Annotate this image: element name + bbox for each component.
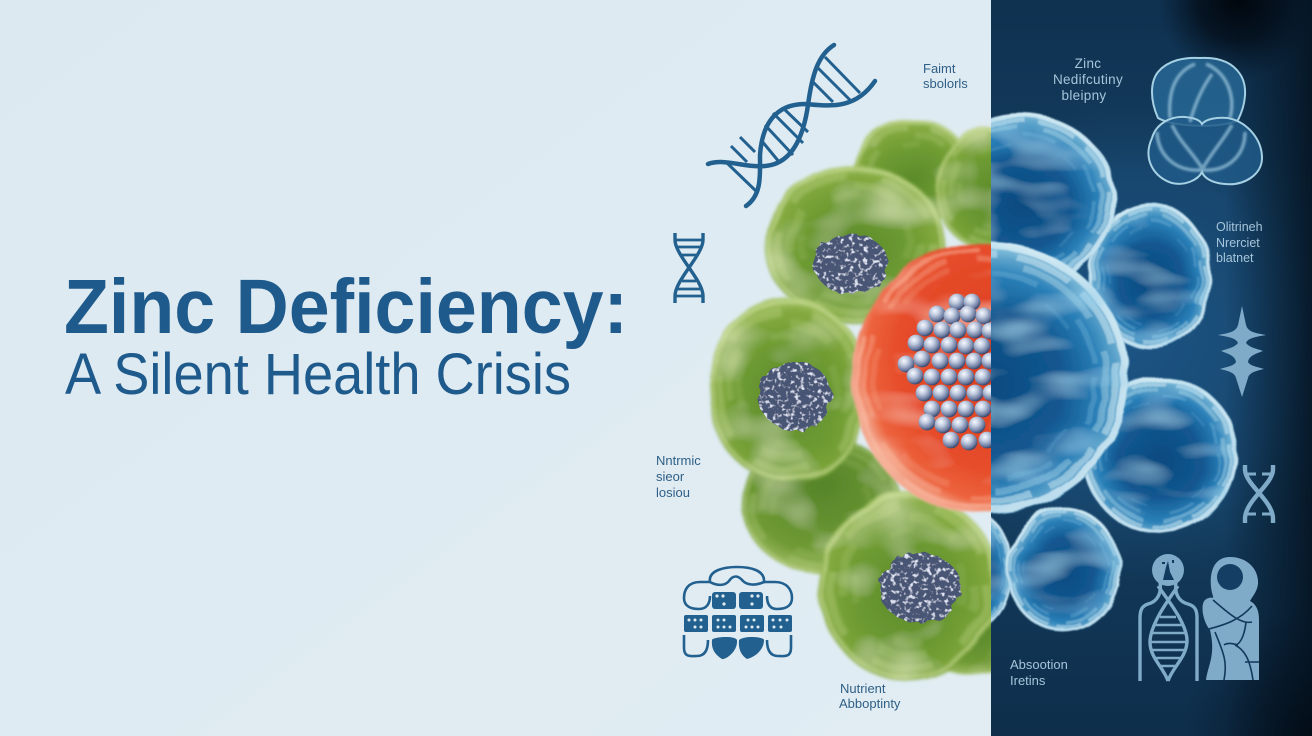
label: top centre: sbolorls [923, 76, 968, 91]
label: left lower: losiou [656, 485, 690, 500]
cell: upper left green [765, 165, 945, 323]
label: zinc: Zinc [1075, 56, 1101, 71]
dark background panel [991, 0, 1312, 736]
cell: central blue [991, 240, 1130, 515]
icon: small DNA helix [675, 233, 703, 303]
cell: lower behind green [742, 437, 902, 573]
label: zinc: bleipny [1062, 88, 1106, 103]
label: nutrient: Abboptinty [839, 696, 901, 711]
cell: bottom right behind [946, 621, 991, 677]
cell: left green [707, 298, 869, 482]
label: left lower: Nntrmic [656, 453, 701, 468]
cluster: upper left cell [814, 234, 888, 294]
zinc ball cluster [898, 294, 999, 450]
cell: top green [852, 118, 960, 220]
icon: figure with ring head [1203, 557, 1259, 680]
cluster: bottom cell [879, 553, 961, 623]
icon: figure with DNA [1140, 554, 1197, 681]
cell: central red [849, 242, 991, 514]
cell: bottom blue [1006, 506, 1120, 632]
label: right middle: Nrerciet [1216, 236, 1260, 250]
cell: bottom green [818, 492, 998, 680]
icon: spine [1218, 306, 1266, 397]
title: Zinc Deficiency: [64, 264, 628, 350]
label: left lower: sieor [656, 469, 685, 484]
label: top centre: Faimt [923, 61, 956, 76]
icon: intestine / absorption grid [684, 567, 792, 659]
cell: right upper blue [1088, 203, 1212, 349]
icon: translucent brain [1149, 58, 1262, 184]
cell: small blue sliver [991, 516, 1011, 624]
icon: small DNA, dark side [1245, 465, 1273, 523]
green cell cluster, left half [707, 119, 1100, 680]
cell: top blue [991, 111, 1118, 272]
label: absorption: Absootion [1010, 657, 1068, 672]
label: right middle: blatnet [1216, 251, 1254, 265]
cell: right lower blue [1082, 376, 1238, 534]
blue cell cluster, right half [851, 114, 1238, 632]
label: zinc: Nedifcutiny [1053, 72, 1123, 87]
label: nutrient: Nutrient [840, 681, 886, 696]
label: absorption: Iretins [1010, 673, 1046, 688]
light background panel [0, 0, 991, 736]
cell: right upper green [934, 124, 991, 246]
cluster: left cell [758, 362, 832, 430]
subtitle: A Silent Health Crisis [65, 342, 571, 407]
icon: large DNA helix [708, 45, 875, 206]
title [64, 264, 628, 407]
label: right middle: Olitrineh [1216, 220, 1263, 234]
